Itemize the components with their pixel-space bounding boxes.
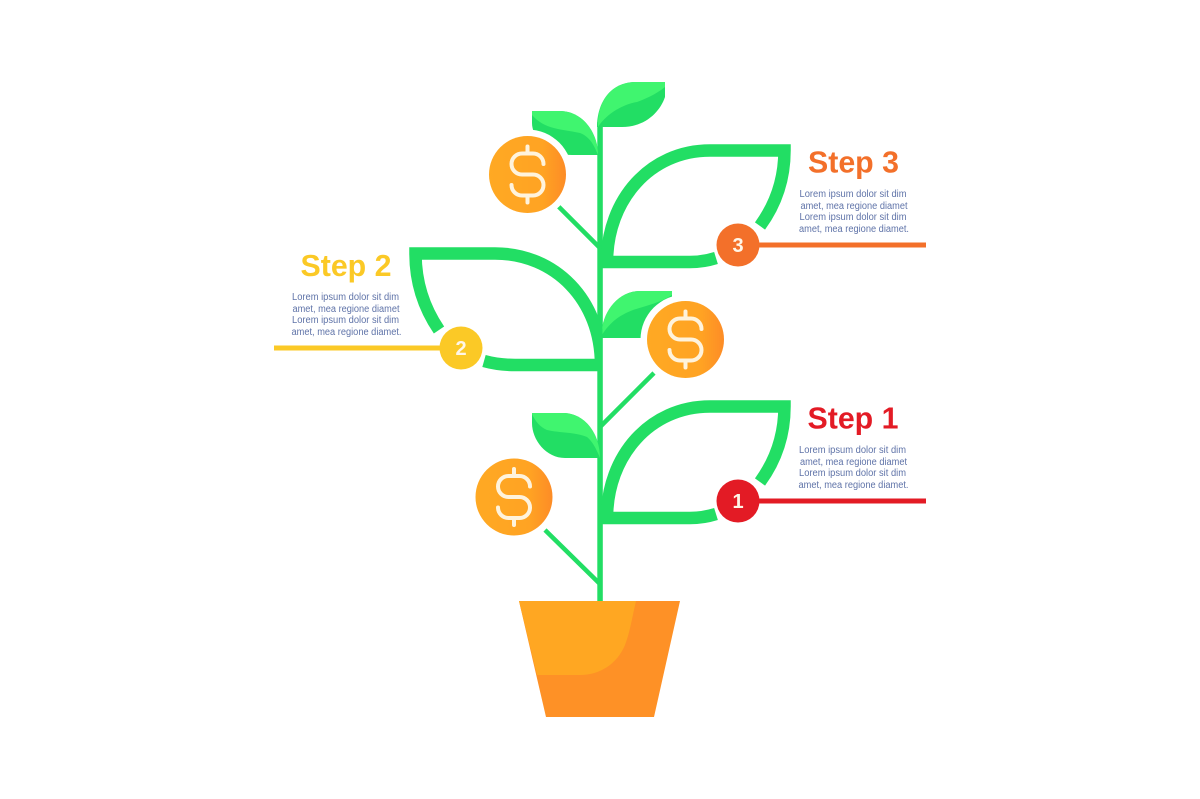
infographic bbox=[274, 82, 926, 717]
step 3 number badge bbox=[716, 224, 760, 266]
coin: top bbox=[482, 130, 572, 220]
step 2 connector line bbox=[274, 346, 450, 350]
step 1 heading: Step 1 bbox=[808, 400, 898, 436]
step 2 callout bbox=[274, 248, 482, 370]
coin: middle bbox=[640, 294, 730, 384]
large leaf outline: step 2 bbox=[416, 254, 601, 365]
step 2 description: amet, mea regione diamet. bbox=[292, 327, 402, 338]
step 3 heading: Step 3 bbox=[808, 144, 899, 180]
leaf: lower left bbox=[532, 413, 600, 458]
step 3 description: amet, mea regione diamet bbox=[800, 201, 908, 212]
step 1 description: Lorem ipsum dolor sit dim bbox=[799, 445, 906, 456]
step 3 number badge: 3 bbox=[732, 235, 744, 257]
step 1 connector line bbox=[750, 498, 926, 504]
step 3 callout bbox=[716, 144, 926, 266]
large leaf outline: step 3 bbox=[607, 150, 784, 262]
step 1 description: amet, mea regione diamet bbox=[800, 457, 907, 468]
step 2 number badge: 2 bbox=[455, 338, 467, 360]
plant stem bbox=[545, 122, 654, 603]
step 3 connector line bbox=[750, 242, 926, 248]
large leaf outline: step 1 bbox=[607, 406, 784, 518]
step 1 description: amet, mea regione diamet. bbox=[798, 480, 908, 491]
step 2 heading: Step 2 bbox=[300, 248, 392, 283]
step 1 number badge bbox=[716, 480, 760, 522]
leaf: middle right bbox=[601, 291, 672, 338]
step 3 description: amet, mea regione diamet. bbox=[799, 224, 909, 235]
step 1 description: Lorem ipsum dolor sit dim bbox=[799, 468, 906, 479]
step 2 description: Lorem ipsum dolor sit dim bbox=[292, 292, 399, 303]
step 1 callout bbox=[716, 400, 926, 522]
flower pot bbox=[519, 601, 680, 717]
step 2 description: amet, mea regione diamet bbox=[292, 304, 400, 315]
step 2 number badge bbox=[440, 326, 482, 370]
coin: lower bbox=[476, 458, 552, 536]
step 2 description: Lorem ipsum dolor sit dim bbox=[292, 315, 399, 326]
step 3 description: Lorem ipsum dolor sit dim bbox=[800, 212, 906, 223]
leaf: top left bbox=[532, 111, 598, 155]
step 1 number badge: 1 bbox=[732, 491, 744, 513]
leaf: top right bbox=[597, 82, 665, 127]
step 3 description: Lorem ipsum dolor sit dim bbox=[800, 189, 906, 200]
